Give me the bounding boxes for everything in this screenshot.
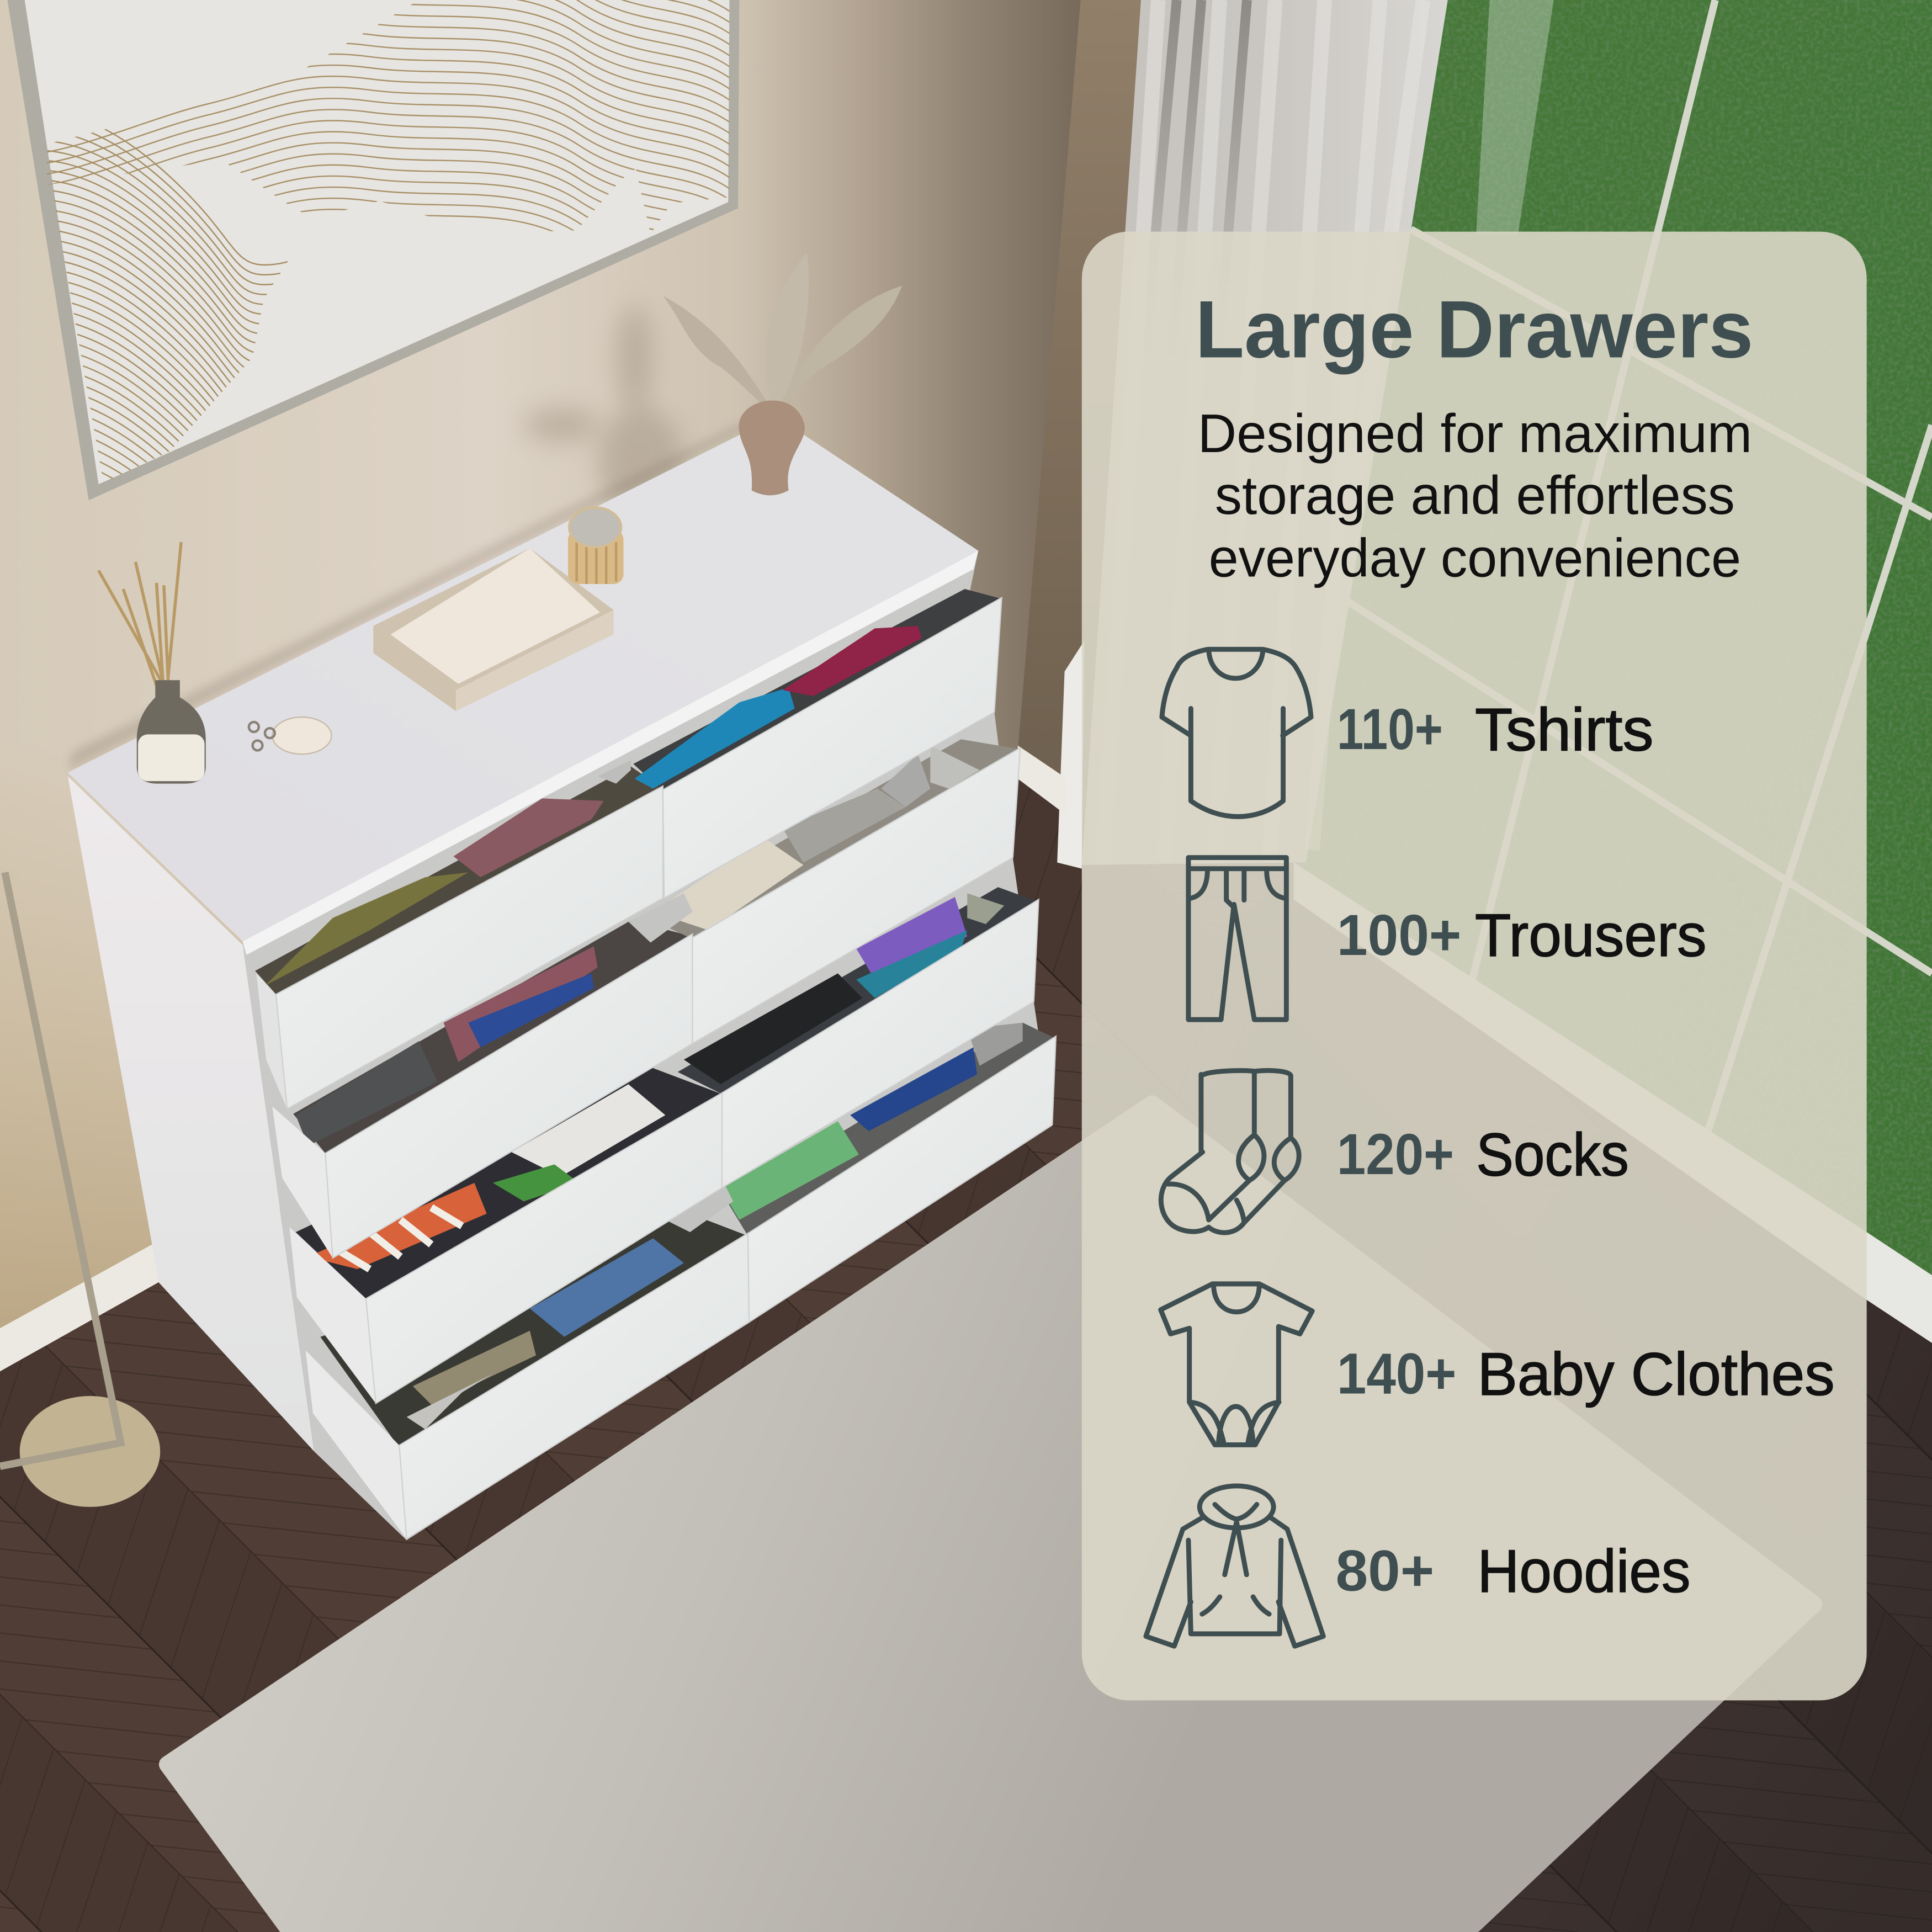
stacked books (373, 548, 614, 711)
vase with pampas (663, 253, 902, 495)
drawer row 4 interiors (320, 1023, 1056, 1448)
window with lawn view (1294, 0, 1932, 1343)
icon: hoodie (1146, 1486, 1323, 1646)
row: socks (1161, 1070, 1629, 1233)
gold contour lines (47, 0, 730, 483)
ring dish (249, 717, 331, 754)
row: t-shirts (1162, 649, 1654, 816)
pampas shadow on wall (524, 306, 683, 518)
candle jar (568, 508, 623, 584)
dresser shadow on wall (68, 400, 789, 770)
wooden herringbone floor (0, 779, 1932, 1932)
grey area rug (168, 1104, 1814, 1932)
info panel (1082, 232, 1867, 1700)
dresser top surface (68, 416, 978, 941)
framed art on wall (8, 0, 740, 500)
drawer side panels (256, 973, 407, 1539)
left baseboard (0, 1242, 160, 1371)
row: trousers: Trousers (1475, 902, 1707, 969)
row: baby clothes (1161, 1284, 1835, 1445)
row: socks: Socks (1476, 1121, 1629, 1188)
right baseboard (1018, 745, 1067, 816)
panel subtitle (1198, 403, 1752, 588)
row: socks: 120+ (1337, 1122, 1454, 1187)
side wall by the window (1018, 0, 1146, 869)
row: baby clothes: 140+ (1337, 1342, 1456, 1406)
drawer row 3 interiors (296, 887, 1039, 1299)
glossy drawer fronts (276, 598, 1056, 1539)
drawer row 1 interiors (255, 589, 1002, 994)
icon: trousers (1188, 858, 1286, 1020)
panel subtitle: storage and effortless (1215, 465, 1735, 526)
dresser side panel (68, 776, 314, 1451)
white dresser (68, 416, 1056, 1540)
row: baby clothes: Baby Clothes (1477, 1341, 1835, 1408)
panel subtitle: everyday convenience (1209, 528, 1741, 588)
icon: baby bodysuit (1161, 1284, 1312, 1445)
drawer row 2 interiors (293, 739, 1020, 1153)
icon: socks (1161, 1070, 1299, 1233)
darker floor on the right (862, 862, 1932, 1932)
panel title: Large Drawers (1195, 284, 1753, 375)
row: hoodies (1146, 1486, 1690, 1646)
row: hoodies: Hoodies (1477, 1538, 1690, 1605)
row: trousers: 100+ (1337, 903, 1461, 968)
sheer curtain (1057, 0, 1448, 869)
floor lamp (0, 872, 160, 1507)
row: t-shirts: Tshirts (1475, 696, 1654, 763)
row: t-shirts: 110+ (1337, 697, 1443, 762)
panel subtitle: Designed for maximum (1198, 403, 1752, 464)
row: hoodies: 80+ (1336, 1539, 1434, 1604)
icon: t-shirt (1162, 649, 1311, 816)
wall background (0, 0, 1084, 1932)
row: trousers (1188, 858, 1707, 1020)
dresser inner carcass (243, 551, 1052, 1540)
reed diffuser (99, 542, 206, 784)
warm light on lower wall (0, 739, 616, 1371)
